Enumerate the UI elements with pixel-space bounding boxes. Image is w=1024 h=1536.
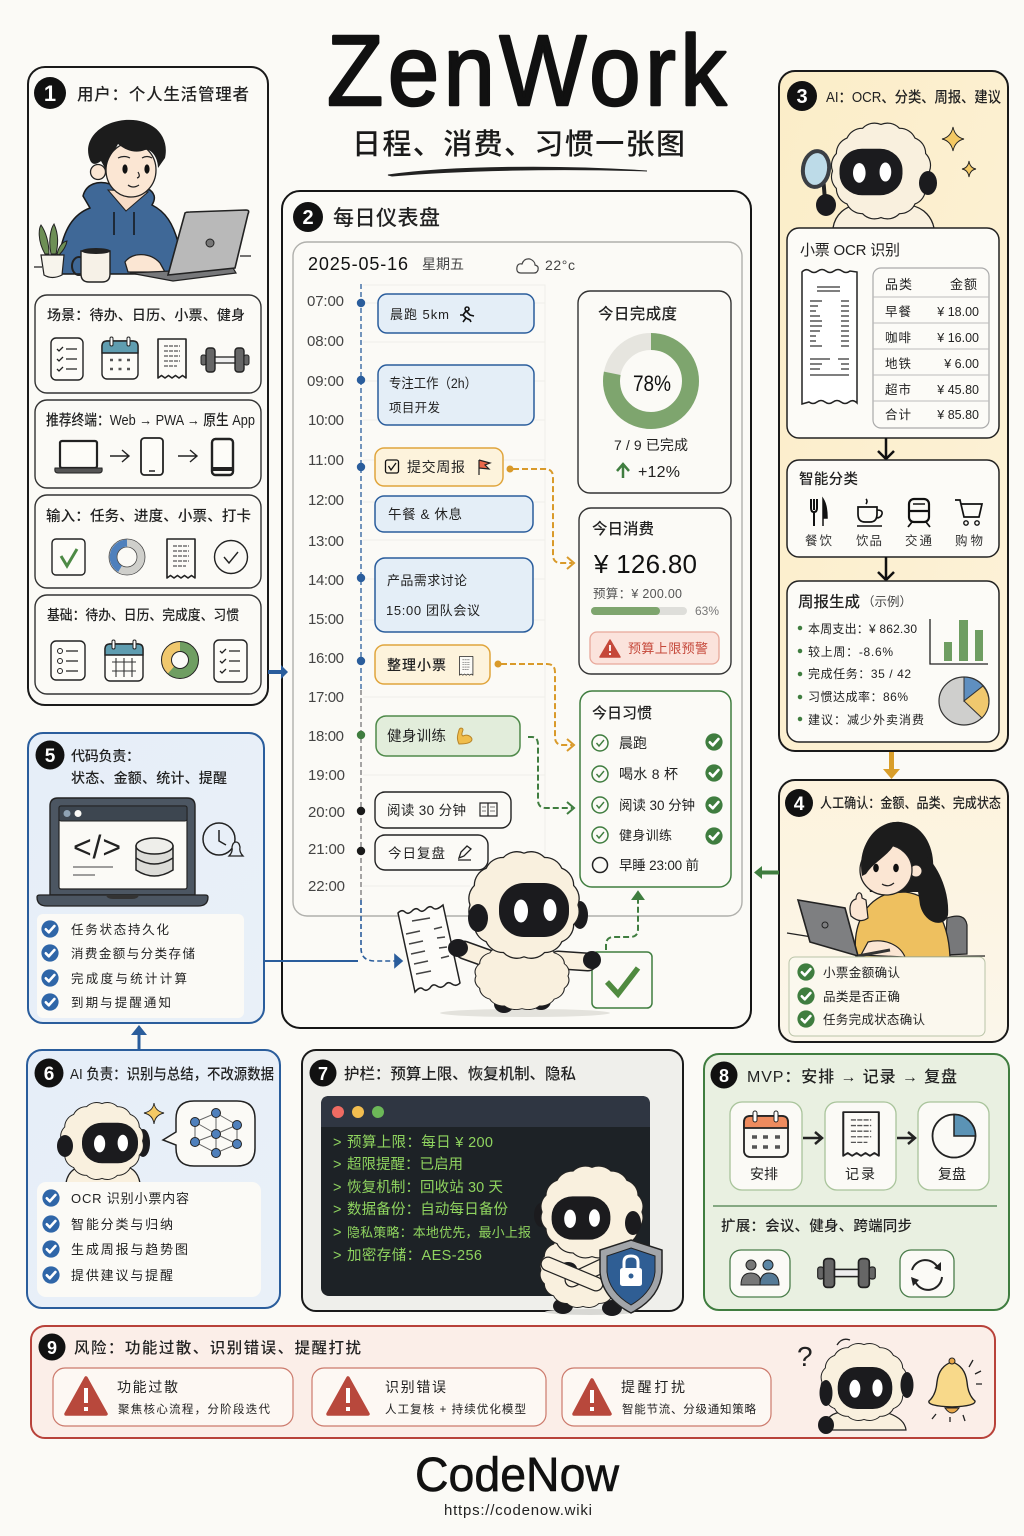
budget alert <box>590 632 719 664</box>
hour labels: 07:00 <box>307 293 344 310</box>
check box <box>592 952 652 1008</box>
donut chart: 78% <box>612 342 690 420</box>
arrow: code to dashboard <box>264 960 358 962</box>
icon: todo list <box>51 641 85 680</box>
mascot: puzzled sheep <box>818 1339 914 1434</box>
table: ¥ 18.00 <box>936 305 979 319</box>
arrow: OCR to classify <box>878 438 894 459</box>
icon: receipt <box>158 339 186 378</box>
icon: cup <box>857 499 882 526</box>
footer url: https://codenow.wiki <box>444 1502 592 1519</box>
box: input <box>35 495 261 588</box>
terminal lines: 数据备份：自动每日备份 <box>347 1201 508 1218</box>
badge 5: 5 <box>45 746 56 767</box>
event: product meeting <box>375 558 533 632</box>
box: classify <box>787 460 999 557</box>
terminal lines: > <box>333 1135 341 1151</box>
icon: bell <box>929 1358 982 1422</box>
event: reading: 阅读 30 分钟 <box>387 802 466 818</box>
checklist: OCR 识别小票内容 <box>71 1191 189 1206</box>
event: workout: 健身训练 <box>387 728 446 745</box>
panel 1: user <box>28 67 268 705</box>
hour labels: 13:00 <box>308 533 344 550</box>
event: focus work: 专注工作（2h） <box>389 376 477 391</box>
icon: calendar <box>105 640 143 681</box>
box: receipt OCR: 小票 OCR 识别 <box>800 242 900 259</box>
checklist <box>37 1182 261 1297</box>
terminal lines: > <box>333 1225 341 1241</box>
hour labels: 19:00 <box>308 767 345 784</box>
event: receipts: 整理小票 <box>387 657 446 673</box>
panel 4: human confirmation <box>779 780 1008 1042</box>
event: reading <box>375 792 511 828</box>
report items: 本周支出：¥ 862.30 <box>808 622 917 636</box>
box: foundation: 基础：待办、日历、完成度、习惯 <box>47 607 239 623</box>
icon: laptop <box>55 441 102 473</box>
card: completion <box>578 291 731 493</box>
hour labels: 17:00 <box>308 689 344 706</box>
heading: MVP：安排 → 记录 → 复盘 <box>747 1068 957 1086</box>
panel 3: AI <box>779 71 1008 751</box>
habit: workout: 健身训练 <box>619 828 672 843</box>
donut chart: 78%: 78% <box>633 371 671 396</box>
card: spending: 预算：¥ 200.00 <box>593 586 682 601</box>
mascot: sheep <box>57 1103 150 1183</box>
terminal lines: 恢复机制：回收站 30 天 <box>347 1178 503 1196</box>
table: 地铁 <box>885 357 911 371</box>
box: scenarios <box>35 295 261 393</box>
panel 6: AI responsibilities <box>27 1050 280 1308</box>
box: classify: 饮品 <box>856 534 882 548</box>
terminal <box>321 1096 650 1296</box>
risk card 3 <box>562 1368 771 1426</box>
badge 1: 1 <box>44 81 56 106</box>
hour labels: 22:00 <box>308 878 345 895</box>
heading: 状态、金额、统计、提醒 <box>71 770 227 786</box>
hour labels: 12:00 <box>308 492 344 509</box>
badge 3: 3 <box>796 86 808 108</box>
hour labels: 20:00 <box>308 804 345 821</box>
risk card 3: 智能节流、分级通知策略 <box>622 1402 756 1416</box>
heading: user: 用户：个人生活管理者 <box>77 85 249 104</box>
weather <box>517 257 575 273</box>
box: weekly report: 周报生成 <box>798 593 860 611</box>
terminal lines <box>333 1134 531 1264</box>
icon: dumbbell <box>818 1259 875 1287</box>
hour labels: 11:00 <box>308 452 344 469</box>
event: receipts <box>375 645 490 684</box>
icon: donut <box>162 642 198 678</box>
badge 7 <box>310 1060 336 1086</box>
habit: workout <box>592 827 723 845</box>
mascot: sheep with magnifier <box>801 123 937 228</box>
table: ¥ 45.80 <box>936 383 979 397</box>
confirmation list: 任务完成状态确认 <box>823 1012 925 1027</box>
box: classify: 餐饮 <box>805 533 832 548</box>
box: classify: 智能分类 <box>799 470 858 488</box>
event: run: 晨跑 5km <box>390 307 449 322</box>
icon: train <box>908 499 930 527</box>
habit: run: 晨跑 <box>619 735 647 751</box>
table: 超市 <box>885 382 911 397</box>
habit: sleep: 早睡 23:00 前 <box>619 857 699 873</box>
habit: water <box>592 764 723 782</box>
card: spending: 今日消费 <box>592 519 654 538</box>
card: completion: 今日完成度 <box>598 304 677 323</box>
event: review: 今日复盘 <box>388 845 445 861</box>
event: review <box>375 835 488 870</box>
illustration: laptop with code <box>37 798 208 906</box>
risk card 1: 功能过散 <box>117 1379 178 1395</box>
extensions text: 扩展：会议、健身、跨端同步 <box>721 1218 912 1235</box>
confirmation list: 小票金额确认 <box>823 965 900 980</box>
illustration: man at laptop <box>34 120 251 282</box>
checklist: 到期与提醒通知 <box>71 995 171 1010</box>
box: devices <box>35 400 261 488</box>
checklist: 任务状态持久化 <box>71 922 169 937</box>
badge 5 <box>36 740 64 770</box>
step: schedule: 安排 <box>750 1166 778 1182</box>
step: review: 复盘 <box>938 1166 966 1182</box>
checklist: 消费金额与分类存储 <box>71 946 195 961</box>
panel 7: guardrails <box>302 1050 683 1316</box>
pie chart <box>939 677 989 725</box>
heading: 每日仪表盘 <box>333 207 440 230</box>
box: weekly report <box>787 581 999 742</box>
report items: 完成任务：35 / 42 <box>808 666 911 681</box>
card: habits <box>580 691 731 887</box>
table: ¥ 85.80 <box>936 408 979 422</box>
card: completion: 7 / 9 已完成 <box>614 437 688 453</box>
trend up <box>617 464 680 481</box>
step: review <box>918 1102 989 1190</box>
hour labels: 18:00 <box>308 728 344 745</box>
event: workout <box>376 716 520 756</box>
event: product meeting: 15:00 团队会议 <box>386 603 480 618</box>
table: 合计 <box>885 407 911 422</box>
inner dashboard frame <box>293 242 742 916</box>
event: focus work: 项目开发 <box>389 400 440 415</box>
icon: clock with bell <box>203 823 243 856</box>
event: weekly report <box>375 448 503 486</box>
event: lunch <box>375 496 533 532</box>
arrow <box>178 450 197 462</box>
risk card 2: 识别错误 <box>385 1379 446 1395</box>
box: classify: 购物 <box>955 533 983 548</box>
heading <box>71 748 227 786</box>
icon: checkbox <box>52 539 85 575</box>
terminal lines: 隐私策略：本地优先，最小上报 <box>347 1225 531 1240</box>
heading: 代码负责： <box>71 748 140 764</box>
terminal lines: > <box>333 1157 341 1173</box>
terminal lines: 加密存储：AES-256 <box>347 1247 482 1264</box>
checklist: 完成度与统计计算 <box>71 971 187 986</box>
weather: 22°c <box>545 257 575 273</box>
report items: 习惯达成率：86% <box>808 689 908 704</box>
step: schedule <box>730 1102 802 1190</box>
box: receipt OCR <box>787 228 999 438</box>
table <box>873 268 989 428</box>
badge 6: 6 <box>44 1064 54 1085</box>
card: habits: 今日习惯 <box>592 704 652 722</box>
hour labels: 15:00 <box>308 611 344 628</box>
report items <box>800 622 924 727</box>
event: run <box>378 294 534 333</box>
illustration: laptop with code: </> <box>73 829 121 865</box>
badge 2 <box>293 202 323 232</box>
step: record <box>825 1102 896 1190</box>
mascot: sheep with receipt <box>398 852 652 1017</box>
report items: 较上周：-8.6% <box>808 644 893 659</box>
icon: phone <box>141 438 163 475</box>
table: 金额 <box>950 277 977 292</box>
timeline <box>357 284 365 900</box>
arrow <box>803 1132 822 1144</box>
arrow <box>110 450 129 462</box>
icon: checklist <box>51 338 83 380</box>
checklist: 提供建议与提醒 <box>71 1268 173 1283</box>
checklist: 智能分类与归纳 <box>71 1217 173 1232</box>
card: spending <box>579 508 731 674</box>
terminal lines: > <box>333 1180 341 1196</box>
hour labels: 14:00 <box>308 572 344 589</box>
bar chart <box>930 619 988 664</box>
receipt image <box>802 270 857 404</box>
heading: AI：OCR、分类、周报、建议 <box>826 88 1001 106</box>
trend up: +12% <box>638 464 680 481</box>
confirmation list <box>789 957 985 1036</box>
hour labels: 16:00 <box>308 650 344 667</box>
title: ZenWork: ZenWork <box>327 15 731 127</box>
footer brand: CodeNow <box>415 1449 619 1502</box>
connector: receipts to habits <box>496 662 574 751</box>
hour labels: 21:00 <box>308 841 345 858</box>
step: record: 记录 <box>845 1166 875 1182</box>
question mark: ? <box>797 1341 813 1372</box>
icon: native phone <box>212 439 233 475</box>
heading: AI 负责：识别与总结，不改源数据 <box>70 1066 274 1083</box>
icon: sync <box>900 1250 954 1297</box>
connector: code to receipt <box>361 900 402 967</box>
terminal lines: > <box>333 1202 341 1218</box>
terminal lines: > <box>333 1248 341 1264</box>
mascot: sheep with shield <box>534 1166 662 1316</box>
table: ¥ 16.00 <box>936 331 979 345</box>
panel 8: MVP <box>704 1054 1009 1310</box>
box: input: 输入：任务、进度、小票、打卡 <box>46 508 251 525</box>
box: classify: 交通 <box>905 533 932 548</box>
badge 8 <box>710 1062 738 1088</box>
connector: workout to habits <box>528 737 574 814</box>
risk card 2 <box>312 1368 546 1426</box>
database <box>136 838 173 876</box>
badge 2: 2 <box>302 207 314 229</box>
report items: 建议：减少外卖消费 <box>808 713 924 727</box>
table: ¥ 6.00 <box>943 357 979 371</box>
checklist: 生成周报与趋势图 <box>71 1242 188 1257</box>
sparkles <box>942 127 976 177</box>
icon: dumbbell <box>201 348 249 372</box>
hour labels: 08:00 <box>307 333 344 350</box>
progress bar: 63% <box>695 604 719 618</box>
budget alert: 预算上限预警 <box>628 641 708 656</box>
subtitle: 日程、消费、习惯一张图 <box>352 128 685 161</box>
sparkle <box>144 1103 164 1124</box>
badge 1 <box>34 77 66 109</box>
subtitle underline <box>388 167 647 176</box>
arrow <box>897 1132 915 1144</box>
event: focus work <box>378 365 534 425</box>
card: spending: ¥ 126.80 <box>593 549 697 579</box>
habit: run <box>592 733 723 751</box>
icon: cutlery <box>811 499 827 526</box>
heading: 人工确认：金额、品类、完成状态 <box>820 795 1001 811</box>
terminal lines: 预算上限：每日 ¥ 200 <box>347 1134 493 1151</box>
icon: circle check <box>214 540 248 574</box>
habit: reading <box>592 796 723 814</box>
arrow: AI to confirmation <box>883 751 900 779</box>
date: 2025-05-16 <box>308 254 408 274</box>
arrow: classify to report <box>878 557 894 580</box>
badge 9: 9 <box>47 1338 57 1358</box>
speech bubble: network <box>163 1101 255 1166</box>
connector: check to habits <box>606 892 643 950</box>
checklist <box>37 914 244 1018</box>
habit: reading: 阅读 30 分钟 <box>619 797 695 813</box>
panel 5: code responsibilities <box>28 733 264 1023</box>
arrow: confirmation to habits <box>754 866 779 879</box>
habit: water: 喝水 8 杯 <box>619 766 678 782</box>
panel 9: risks <box>31 1326 995 1438</box>
badge 9 <box>38 1334 66 1360</box>
table: 早餐 <box>885 304 911 319</box>
table: 咖啡 <box>885 330 911 345</box>
weekday: 星期五 <box>422 256 464 272</box>
icon: calendar <box>102 337 138 379</box>
badge 3 <box>787 81 817 111</box>
event: product meeting: 产品需求讨论 <box>387 573 467 588</box>
illustration: woman at laptop <box>787 822 985 957</box>
table: 品类 <box>885 277 912 292</box>
receipt <box>398 905 460 992</box>
box: foundation <box>35 595 261 694</box>
badge 4 <box>785 789 813 817</box>
badge 7: 7 <box>318 1064 328 1084</box>
badge 6 <box>34 1058 64 1088</box>
icon: cart <box>955 500 982 525</box>
connector: weekly report to spending <box>508 466 574 569</box>
heading: 风险：功能过散、识别错误、提醒打扰 <box>74 1339 361 1357</box>
icon: receipt <box>167 539 195 578</box>
arrow: user to dashboard <box>268 665 288 679</box>
icon: habits <box>214 640 247 682</box>
confirmation list: 品类是否正确 <box>823 990 900 1004</box>
terminal lines: 超限提醒：已启用 <box>347 1156 463 1173</box>
hour labels: 09:00 <box>307 373 344 390</box>
icon: people <box>730 1250 790 1297</box>
event: weekly report: 提交周报 <box>407 459 465 475</box>
risk card 2: 人工复核 + 持续优化模型 <box>385 1402 526 1416</box>
badge 4: 4 <box>794 794 805 815</box>
heading: 护栏：预算上限、恢复机制、隐私 <box>344 1064 576 1083</box>
box: weekly report: （示例） <box>862 595 912 609</box>
risk card 3: 提醒打扰 <box>621 1379 685 1395</box>
hour labels <box>307 293 345 895</box>
badge 8: 8 <box>719 1066 729 1086</box>
risk card 1 <box>53 1368 293 1426</box>
box: scenarios: 场景：待办、日历、小票、健身 <box>47 307 245 323</box>
shield <box>600 1240 662 1313</box>
hour labels: 10:00 <box>308 412 344 429</box>
risk card 1: 聚焦核心流程，分阶段迭代 <box>118 1402 270 1416</box>
progress bar <box>591 604 719 618</box>
panel 2: dashboard <box>282 191 751 1028</box>
box: devices: 推荐终端：Web → PWA → 原生 App <box>46 412 255 429</box>
event: lunch: 午餐 & 休息 <box>388 506 462 522</box>
arrow: AI to code <box>131 1025 147 1050</box>
icon: progress ring <box>109 539 145 575</box>
